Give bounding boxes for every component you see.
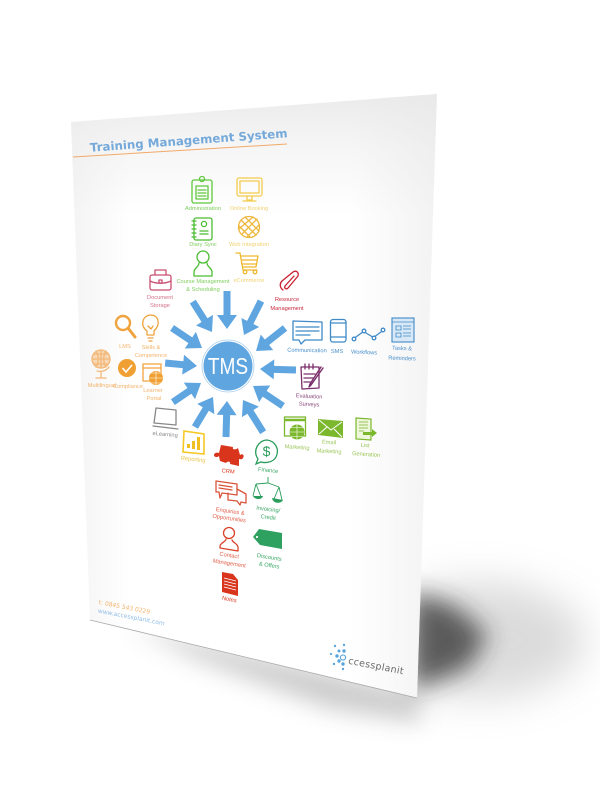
blue group: communication [287,318,416,362]
icon: person outline [220,528,238,551]
icon: diary [192,218,212,240]
icon: briefcase [150,270,171,290]
orange group: learning: Learner [143,388,163,394]
green group: administration: Diary Sync [189,242,217,248]
orange group: learning: Portal [147,396,161,402]
yellow group: booking [229,178,269,284]
orange group: learning: Compliance [113,384,143,390]
lime group: marketing: Marketing [316,448,342,456]
icon: compliance tick [118,359,136,377]
icon: paperclip [280,271,298,290]
icon: dollar speech bubble: $ [263,443,271,459]
contact management [212,528,246,570]
icon: envelope [318,419,343,438]
lime group: marketing [284,417,380,459]
green group: administration: & Scheduling [186,287,220,293]
blue group: communication: Workflows [351,350,377,356]
eLearning: eLearning [152,431,178,439]
document storage: Document [147,295,173,301]
icon: price tag [253,529,282,549]
orange group: learning: Skills & [142,345,161,351]
logo: accessplanit [330,644,405,677]
finance: Finance [258,467,278,475]
icon: clipboard [192,176,212,203]
icon: note document [222,572,238,596]
resource management: Management [270,306,304,312]
paper sheet [60,90,450,710]
invoicing: Invoicing/ [256,506,281,515]
icon: shopping cart [236,253,258,274]
CRM [214,445,244,476]
icon: tasks window [392,318,414,342]
green group: administration [176,176,230,293]
green group: administration: Course Management [176,279,230,285]
icon: light bulb [143,315,158,341]
icon: speech bubbles [216,481,246,505]
evaluation surveys: Surveys [299,401,320,409]
TMS circle: TMS [208,354,248,379]
green group: administration: Administration [185,206,221,212]
orange group: learning [88,315,167,402]
icon: scales [253,477,283,503]
resource management [270,271,304,312]
reporting [181,431,206,464]
icon: learner portal [143,364,163,385]
enquiries [212,481,246,524]
logo dots [330,644,346,670]
title: Training Management System [89,126,288,155]
blue group: communication: SMS [331,349,343,355]
yellow group: booking: Online Booking [230,206,268,212]
document storage: Storage [150,303,170,309]
footer contact details: www.accessplanit.com [97,608,165,627]
notes [221,572,238,604]
contact management: Contact [219,552,240,561]
icon: laptop [153,408,178,429]
evaluation surveys: Evaluation [296,393,322,401]
orange group: learning: Multilingual [88,383,116,389]
enquiries: Opportunities [212,514,246,524]
CRM: CRM [221,468,235,476]
blue group: communication: Communication [287,348,327,354]
icon: puzzle piece [214,445,244,466]
icon: notepad and pen [301,364,323,389]
orange group: learning: Competence [135,353,167,359]
finance [256,440,278,475]
document storage [147,270,173,309]
icon: bar chart report [183,431,204,454]
resource management: Resource [275,297,299,303]
footer contact details: t: 0845 543 0229 [98,599,151,616]
icon: monitor [237,178,262,201]
icon: marketing window [284,417,306,440]
lime group: marketing: Generation [352,451,380,459]
invoicing: Credit [260,514,276,522]
icon: person [194,251,212,276]
blue group: communication: Reminders [388,356,416,362]
icon: phone [330,320,346,342]
TMS circle [202,340,254,392]
icon: magnifier [116,316,135,337]
lime group: marketing: List [360,443,370,449]
yellow group: booking: Web Integration [229,242,269,248]
notes: Notes [221,596,237,604]
icon: workflow line [352,328,385,341]
enquiries: Enquiries & [215,507,245,517]
arrows [164,291,296,438]
icon: web globe [238,216,260,238]
discounts [253,529,282,571]
icon: message bubble [293,321,322,344]
yellow group: booking: eCommerce [234,278,264,284]
invoicing [253,477,283,522]
reporting: Reporting [181,456,206,464]
central TMS circle with arrows [164,291,296,438]
evaluation surveys [296,364,323,409]
icon: globe on stand [92,350,110,378]
icon: list with arrow [356,418,377,440]
lime group: marketing: Marketing [284,444,310,452]
contact management: Management [212,558,246,570]
discounts: Discounts [256,553,282,563]
blue group: communication: Tasks & [392,346,412,352]
logo: accessplanit: ccessplanit [347,656,405,677]
discounts: & Offers [258,561,280,571]
lime group: marketing: Email [322,440,336,446]
footer contact details [97,599,165,627]
eLearning [152,408,178,439]
orange group: learning: LMS [119,344,131,350]
paper drop shadow [130,582,585,722]
